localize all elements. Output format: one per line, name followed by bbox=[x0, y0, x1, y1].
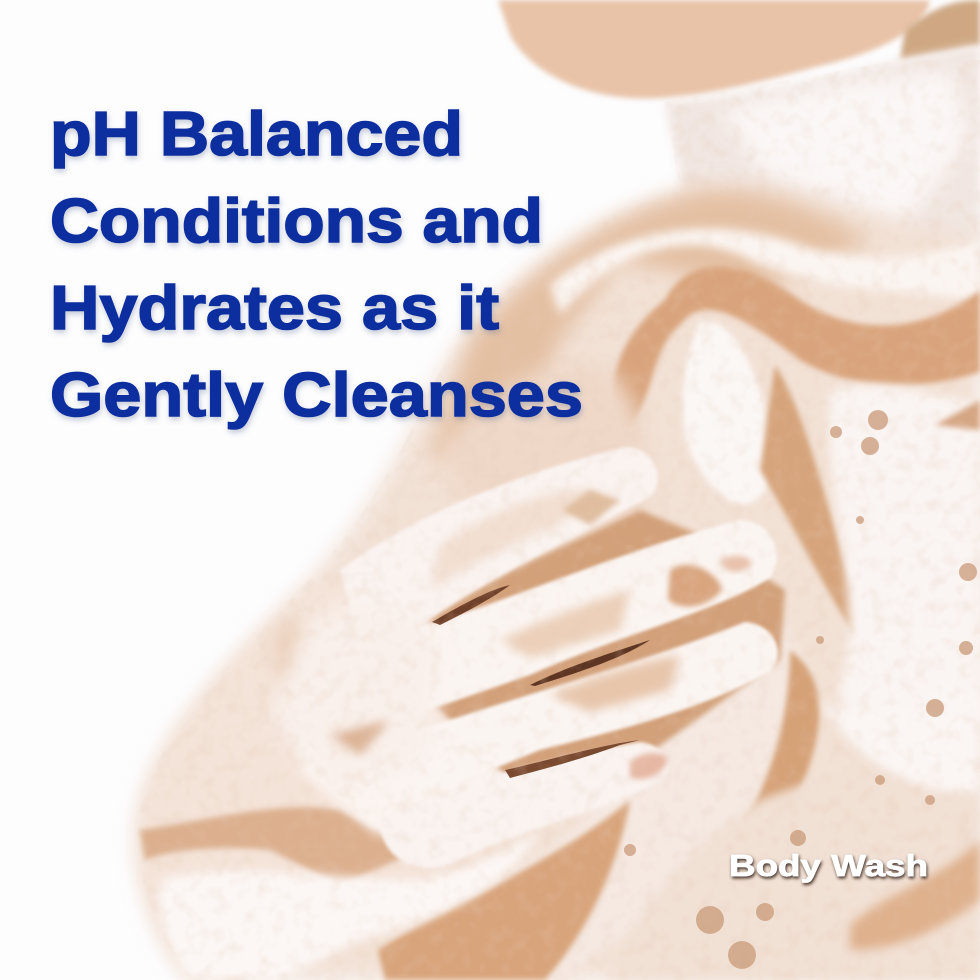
photo: chin and neck bbox=[498, 0, 980, 300]
photo: arm and forearm bbox=[139, 520, 630, 980]
heading: pH Balanced bbox=[50, 100, 463, 169]
heading: Gently Cleanses bbox=[50, 361, 583, 430]
product label: Body Wash bbox=[729, 848, 928, 883]
photo: shoulder and torso bbox=[137, 186, 980, 980]
heading bbox=[50, 100, 583, 430]
heading: Hydrates as it bbox=[50, 274, 499, 343]
heading: Conditions and bbox=[50, 187, 543, 256]
photo: hand with foam bbox=[270, 447, 785, 868]
photo: foam bubbles bbox=[624, 410, 977, 969]
